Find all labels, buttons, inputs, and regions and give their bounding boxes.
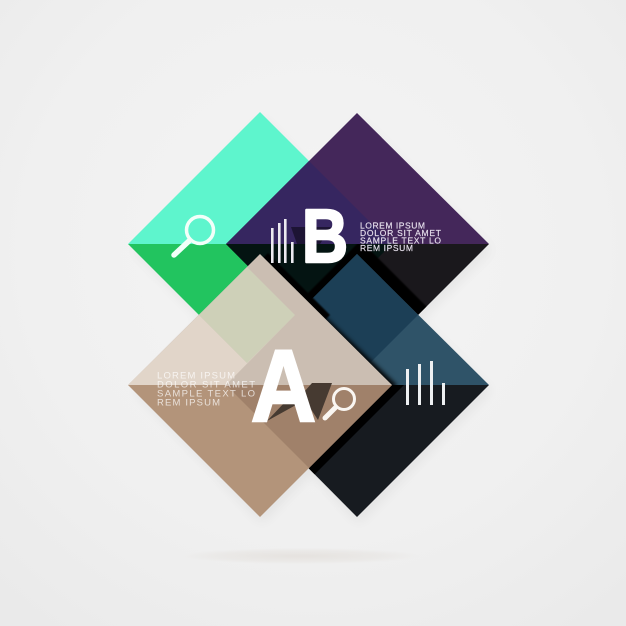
text block: A caption: LOREM IPSUM [157, 370, 235, 382]
heading: letter A: A [251, 329, 316, 443]
text block: A caption: SAMPLE TEXT LO [157, 388, 255, 400]
soft drop shadows [134, 118, 491, 523]
text block: B caption: LOREM IPSUM [360, 220, 425, 230]
icon: magnifier on beige [325, 388, 354, 418]
panel: beige diamond A [128, 254, 392, 517]
letter B shadow [291, 227, 331, 244]
text block: B caption [360, 220, 441, 253]
text block: B caption: SAMPLE TEXT LO [360, 236, 441, 246]
letter A shadow [267, 383, 332, 421]
text block: A caption [157, 370, 255, 408]
text block: B caption: DOLOR SIT AMET [360, 228, 441, 238]
panel: blue diamond [226, 254, 489, 517]
icon: magnifier on green [174, 216, 214, 255]
icon: bars on purple [271, 219, 294, 263]
floor shadow [180, 548, 420, 564]
icon: bars on blue [406, 361, 445, 405]
heading: letter B: B [302, 194, 348, 278]
text block: A caption: DOLOR SIT AMET [157, 380, 255, 390]
beige diamond shadow [264, 254, 404, 474]
panel: green diamond [128, 112, 392, 376]
text block: B caption: REM IPSUM [360, 243, 413, 253]
panel: purple diamond B [226, 113, 489, 315]
text block: A caption: REM IPSUM [157, 398, 220, 408]
